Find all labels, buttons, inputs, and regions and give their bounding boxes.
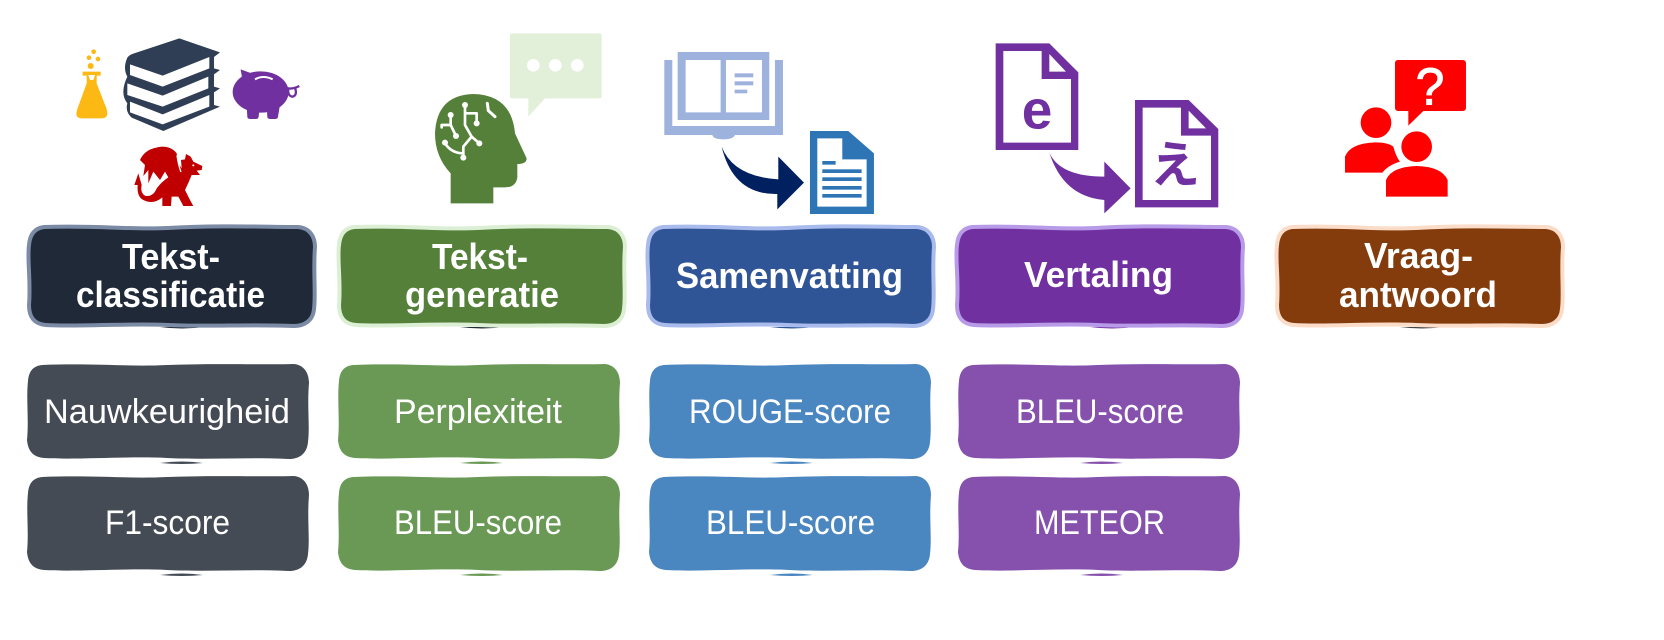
metric: Nauwkeurigheid: Nauwkeurigheid bbox=[44, 393, 290, 431]
metric: BLEU-score bbox=[338, 476, 620, 576]
header: Vertaling bbox=[956, 226, 1243, 328]
metric: BLEU-score bbox=[958, 364, 1240, 464]
metric: Perplexiteit bbox=[338, 364, 620, 464]
metric: METEOR: METEOR bbox=[1034, 504, 1165, 542]
icon: English document: e bbox=[1022, 78, 1052, 140]
header: Tekstclassificatie: Tekst- bbox=[122, 236, 220, 277]
icon: Japanese document: え bbox=[1150, 138, 1200, 194]
header: Tekstgeneratie bbox=[338, 226, 625, 328]
header: Vraag-antwoord: antwoord bbox=[1339, 274, 1497, 315]
icon: English document bbox=[996, 43, 1078, 150]
icon: dragon bbox=[134, 147, 202, 206]
header: Tekstclassificatie bbox=[28, 226, 315, 328]
icon: head with circuit brain bbox=[435, 94, 527, 203]
metric: Nauwkeurigheid bbox=[27, 364, 309, 464]
metric: ROUGE-score bbox=[649, 364, 931, 464]
arrow: book to summary bbox=[722, 147, 804, 209]
metric: METEOR bbox=[958, 476, 1240, 576]
icon: stack of books bbox=[123, 38, 220, 131]
panel: Vraag-antwoord bbox=[1276, 58, 1563, 328]
panel: Vertaling bbox=[956, 43, 1243, 576]
metric: BLEU-score: BLEU-score bbox=[1016, 393, 1184, 431]
arrow: translation bbox=[1049, 153, 1131, 213]
header: Vraag-antwoord: Vraag- bbox=[1364, 235, 1473, 276]
icon: flask bbox=[76, 49, 107, 118]
icon: people with question bubble bbox=[1345, 58, 1466, 197]
icon: speech bubble bbox=[510, 33, 602, 117]
header: Samenvatting: Samenvatting bbox=[676, 255, 903, 296]
header: Tekstgeneratie: Tekst- bbox=[432, 236, 528, 277]
header: Tekstclassificatie: classificatie bbox=[76, 274, 265, 315]
panel: Samenvatting bbox=[647, 52, 934, 576]
metric: F1-score bbox=[27, 476, 309, 576]
metric: ROUGE-score: ROUGE-score bbox=[689, 393, 891, 431]
icon: open book bbox=[664, 52, 783, 139]
metric: F1-score: F1-score bbox=[105, 504, 230, 542]
metric: BLEU-score: BLEU-score bbox=[706, 504, 875, 542]
header: Vertaling: Vertaling bbox=[1024, 254, 1173, 295]
panel: Tekstgeneratie bbox=[338, 33, 625, 576]
icon: people with question bubble: ? bbox=[1416, 58, 1444, 116]
header: Samenvatting bbox=[647, 226, 934, 328]
metric: Perplexiteit: Perplexiteit bbox=[394, 393, 563, 431]
icon: piggy bank bbox=[233, 69, 299, 119]
metric: BLEU-score: BLEU-score bbox=[394, 504, 562, 542]
metric: BLEU-score bbox=[649, 476, 931, 576]
icon: Japanese document bbox=[1135, 100, 1218, 207]
header: Vraag-antwoord bbox=[1276, 226, 1563, 328]
icon: summary document bbox=[810, 131, 874, 214]
header: Tekstgeneratie: generatie bbox=[405, 274, 559, 315]
panel: Tekstclassificatie bbox=[27, 38, 315, 576]
